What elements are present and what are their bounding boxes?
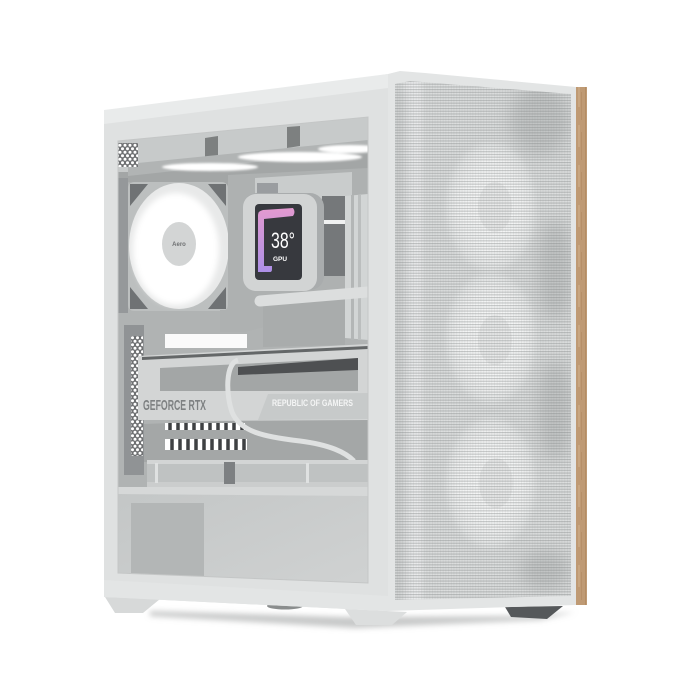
GPU lower plate xyxy=(195,420,351,421)
GPU recessed fan window xyxy=(160,358,358,391)
rear fan xyxy=(128,182,229,311)
fan hub logo: Aero xyxy=(172,242,186,248)
panel: wooden side strip xyxy=(576,87,587,605)
REPUBLIC OF GAMERS label: REPUBLIC OF GAMERS xyxy=(272,398,353,408)
foot: small centre pad xyxy=(267,602,303,610)
expansion vent strip xyxy=(124,325,144,475)
GEFORCE RTX label: GEFORCE RTX xyxy=(143,397,206,414)
vertical highlight band xyxy=(404,78,422,603)
top fan white glows xyxy=(162,145,382,171)
panel: front frame xyxy=(388,71,576,611)
VRM vents xyxy=(257,183,278,194)
floor shadow xyxy=(150,611,575,628)
left grey column xyxy=(118,178,128,313)
front fan 3 xyxy=(446,418,536,548)
side frame top edge xyxy=(104,74,388,124)
lower back wall xyxy=(144,420,368,462)
ROG panel xyxy=(258,393,368,420)
CPU socket dark area xyxy=(322,196,347,276)
fan hub xyxy=(162,222,196,266)
PCI slot covers xyxy=(165,423,247,450)
VRM heatsink cover xyxy=(255,172,352,200)
PSU window xyxy=(131,503,204,577)
coolant tube xyxy=(260,292,368,301)
interior back wall xyxy=(118,182,368,487)
screen bracket xyxy=(258,208,294,272)
illustration: white PC case xyxy=(104,71,587,631)
front fan 2 xyxy=(446,273,536,403)
front fan 1 xyxy=(446,143,536,271)
PSU shroud xyxy=(118,487,368,590)
RAM heatsink xyxy=(345,194,368,340)
graphics card xyxy=(138,344,368,421)
block below tube xyxy=(263,298,345,347)
motherboard panel xyxy=(220,168,368,311)
interior shelf under top fans xyxy=(118,152,368,186)
window interior xyxy=(118,118,368,582)
bottom fans xyxy=(147,460,368,487)
temperature: 38° xyxy=(271,228,295,253)
mesh grid xyxy=(390,78,575,603)
foot: front centre xyxy=(345,609,407,625)
foot: left xyxy=(105,597,160,613)
top fan housing xyxy=(118,117,368,176)
white connector xyxy=(324,220,345,224)
panel: side frame xyxy=(104,74,390,611)
mesh dark swirl shading xyxy=(395,85,573,600)
side frame bottom lip xyxy=(104,580,388,611)
window edge shade xyxy=(118,117,368,583)
LCD screen xyxy=(255,204,302,280)
white GPU cable xyxy=(228,360,354,461)
GPU label: GPU xyxy=(273,256,287,263)
white slot xyxy=(165,334,247,348)
honeycomb vent xyxy=(118,143,138,167)
AIO pump block xyxy=(243,193,324,291)
foot: dark rear xyxy=(505,606,563,619)
panel: front mesh xyxy=(390,78,575,603)
fan corner mounts xyxy=(130,184,226,309)
